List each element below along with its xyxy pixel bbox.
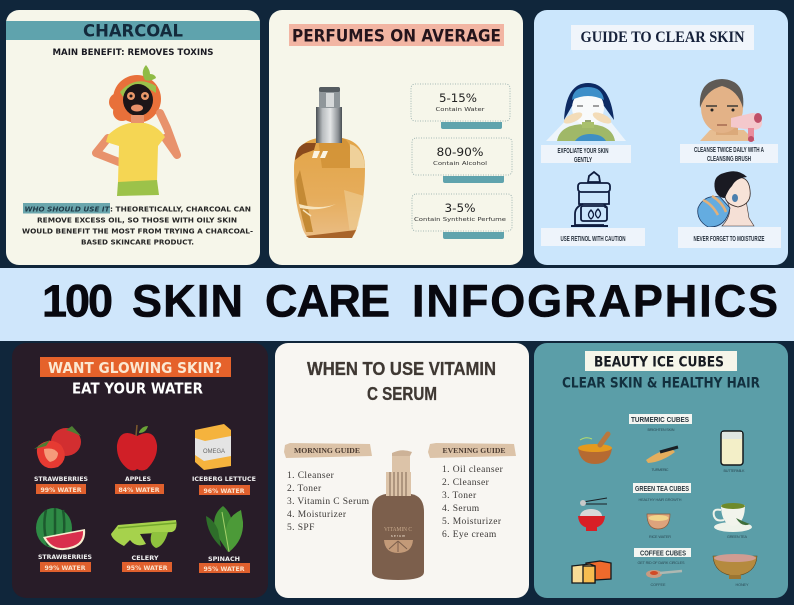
subheading: eat your water: EAT YOUR WATER bbox=[72, 380, 203, 398]
panel: vitamin c serum bbox=[275, 343, 529, 598]
icon: perfume bottle bbox=[294, 87, 365, 238]
evening guide: 6. Eye cream bbox=[442, 530, 497, 540]
icon: mortar and pestle bbox=[578, 434, 612, 464]
morning guide: MORNING GUIDE bbox=[294, 446, 360, 455]
text block: who should use it: REMOVE EXCESS OIL, SO THOSE WITH OILY SKIN bbox=[37, 216, 237, 224]
stat card: synthetic perfume bbox=[412, 194, 512, 239]
banner: 100 skin care infographics: SKIN bbox=[132, 276, 243, 326]
label: strawberries 99% second: 99% WATER bbox=[44, 564, 86, 572]
icon: green tea cup bbox=[714, 503, 752, 539]
heading: vitamin c bbox=[307, 359, 496, 404]
label: cleanse bbox=[680, 144, 778, 163]
label: green tea cubes: GREEN TEA CUBES bbox=[635, 486, 689, 493]
icon: turmeric root: TURMERIC bbox=[652, 468, 669, 472]
panel: guide to clear skin bbox=[534, 10, 788, 265]
evening guide: EVENING GUIDE bbox=[442, 446, 506, 455]
label: retinol: USE RETINOL WITH CAUTION bbox=[560, 236, 626, 243]
label: exfoliate bbox=[541, 145, 631, 164]
icon: honey bowl bbox=[713, 554, 757, 587]
evening guide: 3. Toner bbox=[442, 491, 477, 501]
panel: perfumes on average bbox=[269, 10, 523, 265]
icon: woman with charcoal mask bbox=[96, 65, 177, 196]
text block: who should use it: BASED SKINCARE PRODUCT. bbox=[81, 238, 194, 246]
morning guide: 1. Cleanser bbox=[287, 471, 335, 481]
stat card: water: 5-15% bbox=[439, 91, 477, 105]
heading: guide: GUIDE TO CLEAR SKIN bbox=[580, 29, 744, 46]
stat card: alcohol: Contain Alcohol bbox=[433, 161, 488, 167]
label: strawberries 99% bbox=[34, 475, 88, 494]
label: cleanse: CLEANSING BRUSH bbox=[707, 156, 751, 163]
heading: charcoal bbox=[6, 21, 260, 40]
label: retinol bbox=[541, 228, 645, 246]
icon: strawberries bbox=[34, 426, 81, 468]
icon: retinol bottle bbox=[571, 172, 610, 226]
evening guide: 5. Moisturizer bbox=[442, 517, 502, 527]
morning guide: 5. SPF bbox=[287, 523, 315, 533]
label: coffee cubes bbox=[634, 548, 691, 565]
label: coffee cubes: GET RID OF DARK CIRCLES bbox=[638, 561, 685, 565]
stat card: water bbox=[411, 84, 510, 129]
evening guide bbox=[428, 443, 516, 540]
heading: vitamin c: C SERUM bbox=[367, 384, 437, 404]
label: coffee cubes: COFFEE CUBES bbox=[640, 550, 686, 558]
icon: serum bottle: VITAMIN C bbox=[384, 526, 412, 533]
icon: celery bbox=[111, 520, 176, 548]
text block: who should use it bbox=[22, 203, 253, 246]
stat card: alcohol: 80-90% bbox=[436, 145, 484, 159]
icon: turmeric root bbox=[646, 447, 678, 472]
stat card: synthetic perfume: Contain Synthetic Perfume bbox=[414, 217, 507, 223]
label: exfoliate: EXFOLIATE YOUR SKIN bbox=[558, 148, 608, 155]
evening guide: 2. Cleanser bbox=[442, 478, 490, 488]
heading: vitamin c: WHEN TO USE VITAMIN bbox=[307, 359, 496, 379]
subheading: main benefit: MAIN BENEFIT: REMOVES TOXINS bbox=[52, 48, 214, 58]
text block: who should use it: WOULD BENEFIT THE MOST FROM TRYING A CHARCOAL- bbox=[22, 226, 253, 236]
icon: spinach bbox=[206, 506, 243, 552]
heading: guide bbox=[571, 25, 754, 50]
heading: perfumes: PERFUMES ON AVERAGE bbox=[292, 26, 501, 46]
icon: omega box: OMEGA bbox=[203, 448, 226, 455]
label: spinach 95%: SPINACH bbox=[208, 555, 240, 563]
icon: serum bottle: serum bbox=[391, 534, 405, 538]
icon: buttermilk glass: BUTTERMILK bbox=[724, 469, 745, 473]
icon: serum bottle bbox=[372, 450, 424, 580]
label: celery 95% bbox=[122, 554, 172, 572]
icon: honey bowl: HONEY bbox=[736, 583, 749, 587]
morning guide: 2. Toner bbox=[287, 484, 322, 494]
label: turmeric cubes bbox=[629, 414, 692, 432]
subheading: clear skin: CLEAR SKIN & HEALTHY HAIR bbox=[562, 376, 760, 392]
icon: green tea cup: GREEN TEA bbox=[727, 535, 747, 539]
icon: woman moisturizing bbox=[698, 171, 754, 227]
stat card: synthetic perfume: 3-5% bbox=[444, 201, 476, 215]
label: apples 84%: 84% WATER bbox=[118, 486, 160, 494]
heading: want glowing skin: WANT GLOWING SKIN? bbox=[48, 359, 222, 377]
panel: want glowing skin bbox=[12, 343, 268, 598]
icon: cubes bbox=[572, 561, 611, 583]
banner: 100 skin care infographics: INFOGRAPHICS bbox=[412, 276, 778, 326]
text block: who should use it: WHO SHOULD USE IT bbox=[24, 204, 110, 214]
label: iceberg lettuce 96% bbox=[192, 475, 256, 495]
label: green tea cubes bbox=[633, 483, 691, 502]
heading: charcoal: CHARCOAL bbox=[83, 22, 183, 40]
panel: beauty ice cubes bbox=[534, 343, 788, 598]
label: turmeric cubes: BRIGHTEN SKIN bbox=[648, 428, 675, 432]
morning guide: 3. Vitamin C Serum bbox=[287, 497, 370, 507]
evening guide: 1. Oil cleanser bbox=[442, 465, 504, 475]
label: spinach 95%: 95% WATER bbox=[204, 565, 244, 573]
label: strawberries 99% second bbox=[38, 553, 92, 572]
icon: coffee spoon bbox=[646, 570, 682, 587]
label: iceberg lettuce 96%: ICEBERG LETTUCE bbox=[192, 475, 256, 483]
label: moisturize bbox=[678, 227, 781, 248]
label: turmeric cubes: TURMERIC CUBES bbox=[631, 417, 689, 424]
icon: rice water bowl bbox=[647, 514, 671, 539]
label: apples 84% bbox=[115, 475, 164, 494]
label: strawberries 99% second: STRAWBERRIES bbox=[38, 553, 92, 561]
label: apples 84%: APPLES bbox=[125, 475, 151, 483]
morning guide bbox=[284, 443, 372, 533]
icon: apple bbox=[117, 425, 157, 470]
label: spinach 95% bbox=[199, 555, 250, 573]
banner: 100 skin care infographics: 100 bbox=[42, 276, 113, 326]
stat card: alcohol bbox=[412, 138, 512, 183]
panel: charcoal bbox=[6, 10, 260, 265]
evening guide: 4. Serum bbox=[442, 504, 480, 514]
label: strawberries 99%: STRAWBERRIES bbox=[34, 475, 88, 483]
icon: rice bowl bbox=[578, 498, 607, 531]
banner: 100 skin care infographics bbox=[0, 268, 794, 341]
label: celery 95%: 95% WATER bbox=[126, 564, 168, 572]
stat card: water: Contain Water bbox=[436, 107, 485, 113]
label: celery 95%: CELERY bbox=[132, 554, 159, 562]
icon: woman washing face bbox=[546, 83, 626, 141]
banner: 100 skin care infographics: CARE bbox=[265, 276, 390, 326]
label: green tea cubes: HEALTHY HAIR GROWTH bbox=[638, 498, 682, 502]
icon: buttermilk glass bbox=[721, 431, 745, 473]
icon: watermelon bbox=[36, 508, 85, 550]
label: iceberg lettuce 96%: 96% WATER bbox=[204, 487, 244, 495]
icon: coffee spoon: COFFEE bbox=[650, 583, 666, 587]
label: exfoliate: GENTLY bbox=[574, 157, 592, 164]
heading: beauty ice cubes: BEAUTY ICE CUBES bbox=[594, 354, 724, 370]
icon: woman with cleansing brush bbox=[700, 79, 762, 142]
icon: rice water bowl: RICE WATER bbox=[649, 535, 671, 539]
text block: who should use it: : THEORETICALLY, CHARCOAL CAN bbox=[110, 204, 251, 214]
icon: omega box bbox=[195, 424, 231, 470]
label: strawberries 99%: 99% WATER bbox=[40, 486, 82, 494]
morning guide: 4. Moisturizer bbox=[287, 510, 347, 520]
